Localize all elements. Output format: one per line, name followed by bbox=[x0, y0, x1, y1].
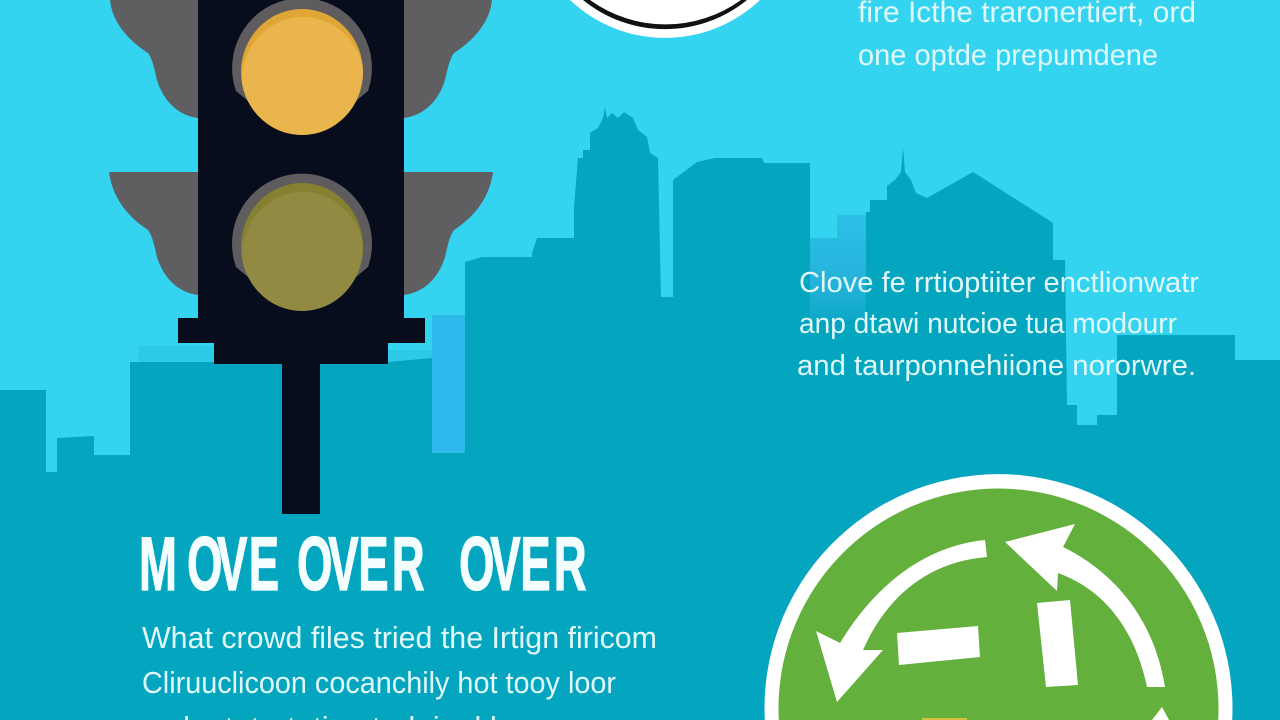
heading: OVER bbox=[297, 522, 425, 607]
lower dim lens bbox=[240, 182, 364, 320]
bar: vertical bbox=[1037, 600, 1078, 687]
text block: bottom left: What crowd files tried the Irtign firicom bbox=[142, 620, 657, 655]
arrow: lower right tip bbox=[1152, 707, 1169, 720]
upper right wing bbox=[404, 0, 492, 118]
upper hood bbox=[232, 0, 372, 101]
text block: bottom left bbox=[142, 620, 657, 720]
icon: traffic light bbox=[109, 0, 493, 514]
yellow marker bbox=[922, 718, 967, 720]
text block: top right: one optde prepumdene bbox=[858, 39, 1158, 72]
upper amber lens bbox=[240, 8, 364, 143]
signal housing bbox=[178, 0, 425, 514]
text block: middle right: anp dtawi nutcioe tua modourr bbox=[799, 308, 1177, 340]
bar: horizontal bbox=[897, 626, 980, 665]
arrow: right curved bbox=[1005, 524, 1165, 687]
sign white border bbox=[764, 474, 1232, 720]
heading bbox=[139, 522, 587, 607]
upper left wing bbox=[110, 0, 198, 118]
text block: bottom left: Cliruuclicoon cocanchily hot tooy loor bbox=[142, 665, 616, 700]
heading: MOVE bbox=[139, 522, 279, 607]
text block: middle right bbox=[797, 267, 1199, 382]
heading: OVER bbox=[459, 522, 587, 607]
lower left wing bbox=[109, 172, 198, 295]
lower hood bbox=[232, 174, 372, 277]
text block: middle right: and taurponnehiione nororwre. bbox=[797, 350, 1196, 382]
sign green face bbox=[778, 489, 1218, 720]
text block: middle right: Clove fe rrtioptiiter enctlionwatr bbox=[799, 267, 1199, 299]
icon: top circular sign bbox=[570, 0, 760, 38]
text block: top right bbox=[858, 0, 1196, 72]
icon: green roundabout sign bbox=[764, 474, 1232, 720]
arrow: left curved bbox=[816, 540, 987, 702]
lower right wing bbox=[404, 172, 493, 295]
